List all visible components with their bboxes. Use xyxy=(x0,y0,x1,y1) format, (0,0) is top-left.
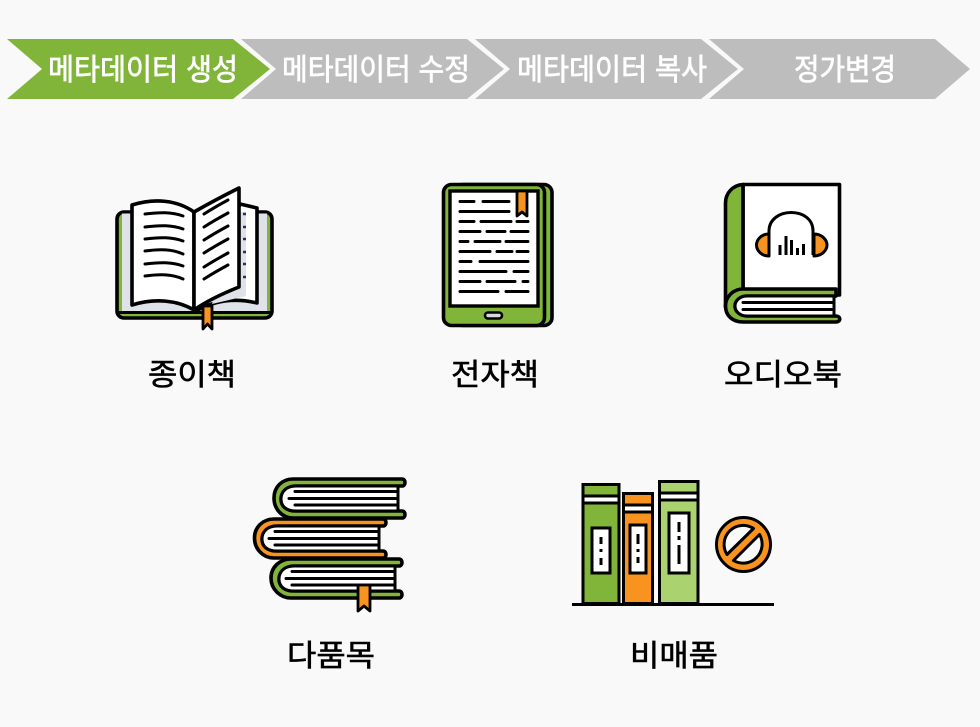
icon: stacked books xyxy=(254,479,405,611)
bottom book xyxy=(271,559,402,598)
label: multi-item: 다품목 xyxy=(287,640,375,673)
icon: e-book xyxy=(444,184,552,326)
step: metadata creation xyxy=(7,39,270,99)
label: not for sale: 비매품 xyxy=(630,640,718,673)
step: metadata edit: 메타데이터 수정 xyxy=(282,54,470,87)
shelf xyxy=(572,603,774,606)
step: price change: 정가변경 xyxy=(794,54,896,87)
label: paper book: 종이책 xyxy=(148,359,236,392)
label: e-book: 전자책 xyxy=(451,359,539,392)
bookmark xyxy=(517,191,527,216)
prohibition sign xyxy=(716,518,770,572)
middle book xyxy=(254,519,386,558)
step: metadata edit xyxy=(241,39,504,99)
top book xyxy=(274,479,405,518)
light green book xyxy=(660,482,698,604)
headphones xyxy=(756,212,827,256)
step: metadata creation: 메타데이터 생성 xyxy=(48,54,238,87)
bookmark xyxy=(203,306,212,329)
icon: paper book xyxy=(117,188,272,329)
step: metadata copy: 메타데이터 복사 xyxy=(517,54,707,87)
orange book xyxy=(624,494,652,604)
step: price change xyxy=(709,39,970,99)
green book xyxy=(583,484,619,604)
icon: books not for sale xyxy=(572,482,774,604)
icon: audiobook xyxy=(726,184,840,322)
step: metadata copy xyxy=(475,39,738,99)
home button xyxy=(485,312,502,318)
bookmark xyxy=(358,585,370,611)
label: audiobook: 오디오북 xyxy=(724,359,842,392)
